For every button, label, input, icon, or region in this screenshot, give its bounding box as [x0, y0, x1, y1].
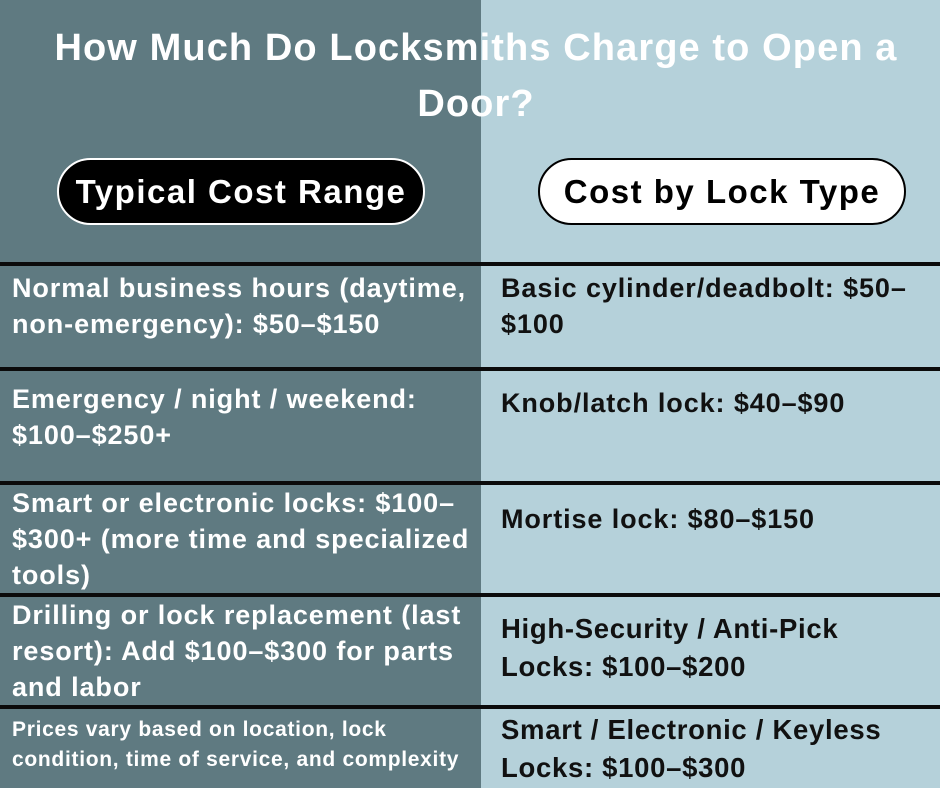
- row 4 right: High-Security / Anti-Pick: [501, 613, 838, 644]
- row 1 left: Normal business hours (daytime,: [12, 273, 466, 303]
- heading pill: typical cost range: Typical Cost Range: [76, 172, 406, 210]
- heading pill: cost by lock type: [538, 158, 906, 225]
- row 1 right: [501, 273, 907, 339]
- row 4 left: Drilling or lock replacement (last: [12, 600, 461, 630]
- row 2 right: Knob/latch lock: $40–$90: [501, 388, 845, 418]
- title: How Much Do Locksmiths Charge to Open a: [54, 27, 898, 69]
- row 3 left: tools): [12, 560, 91, 590]
- heading pill: cost by lock type: Cost by Lock Type: [564, 172, 880, 210]
- row 3 right: Mortise lock: $80–$150: [501, 504, 815, 534]
- row 4 right: [501, 613, 838, 682]
- row 4 left: [12, 600, 461, 702]
- row 5 left: Prices vary based on location, lock: [12, 718, 387, 741]
- row 4 left: and labor: [12, 672, 142, 702]
- row 5 right: Smart / Electronic / Keyless: [501, 714, 881, 745]
- row 1 left: [12, 273, 466, 339]
- row 1 right: $100: [501, 309, 565, 339]
- heading pill: typical cost range: [57, 158, 425, 225]
- title: [54, 27, 898, 125]
- row 3 left: $300+ (more time and specialized: [12, 524, 469, 554]
- row 3 left: Smart or electronic locks: $100–: [12, 488, 455, 518]
- row 4 right: Locks: $100–$200: [501, 651, 746, 682]
- row 5 right: Locks: $100–$300: [501, 752, 746, 783]
- row 2 left: [12, 384, 417, 450]
- row 2 left: $100–$250+: [12, 420, 172, 450]
- row 2 left: Emergency / night / weekend:: [12, 384, 417, 414]
- row 5 right: [501, 714, 881, 783]
- title: Door?: [417, 83, 535, 125]
- row 5 left: [12, 718, 459, 771]
- row 5 left: condition, time of service, and complexity: [12, 748, 459, 771]
- row 1 right: Basic cylinder/deadbolt: $50–: [501, 273, 907, 303]
- row 3 left: [12, 488, 469, 590]
- row 4 left: resort): Add $100–$300 for parts: [12, 636, 454, 666]
- row 1 left: non-emergency): $50–$150: [12, 309, 380, 339]
